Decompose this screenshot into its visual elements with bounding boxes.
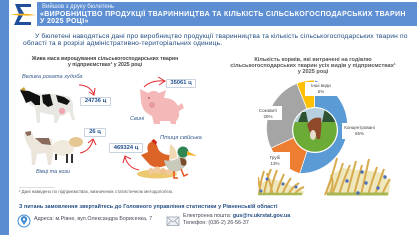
left chart heading bbox=[32, 56, 178, 68]
label: poultry: Птиця свійська bbox=[160, 134, 202, 140]
arrow: cattle bbox=[79, 84, 96, 96]
photo: cow on meadow bbox=[292, 107, 338, 153]
donut chart bbox=[266, 80, 348, 174]
left chart heading: у підприємствах¹ у 2025 році bbox=[68, 62, 142, 68]
intro text bbox=[23, 32, 408, 47]
address: Адреса: м.Рівне, вул.Олександра Борисенка, 7 bbox=[34, 216, 152, 222]
value: poultry bbox=[109, 143, 143, 153]
header note: Вийшов з друку бюлетень bbox=[42, 4, 114, 10]
label: coarse: Грубі bbox=[270, 155, 280, 160]
icon: envelope bbox=[166, 216, 180, 226]
label: other: 6% bbox=[318, 88, 324, 94]
segment: succulent 26% bbox=[266, 83, 314, 148]
left chart heading: Жива маса вирощування сільськогосподарських тварин bbox=[32, 56, 178, 62]
segment: concentrated 55% bbox=[300, 80, 348, 174]
icon: goat bbox=[24, 131, 53, 165]
segment: coarse 13% bbox=[271, 128, 314, 174]
icon: sigma logo bbox=[10, 4, 36, 25]
label: other bbox=[305, 82, 337, 96]
icon: hen, duck and eggs bbox=[137, 139, 197, 179]
value: sheep: 26 ц bbox=[89, 129, 101, 135]
label: concentrated: 55% bbox=[355, 131, 364, 136]
title: «ВИРОБНИЦТВО ПРОДУКЦІЇ ТВАРИННИЦТВА ТА КІЛЬКІСТЬ СІЛЬСЬКОГОСПОДАРСЬКИХ ТВАРИН bbox=[40, 10, 406, 18]
icon: location pin bbox=[18, 214, 30, 228]
right chart heading: сільськогосподарських тварин усіх видів у підприємствах¹ bbox=[230, 63, 396, 69]
intro text: області та в розрізі адміністративно-територіальних одиниць. bbox=[23, 40, 222, 47]
title bbox=[40, 10, 406, 25]
right chart heading bbox=[230, 57, 396, 75]
arrow: poultry bbox=[122, 155, 140, 170]
label: succulent: 26% bbox=[263, 114, 272, 118]
decoration: wheat left bbox=[258, 168, 305, 196]
decoration: wheat right bbox=[324, 158, 391, 196]
contact heading: З питань замовлення звертайтесь до Головного управління статистики у Рівненській області bbox=[19, 204, 278, 210]
contacts bbox=[183, 213, 290, 226]
value: cattle: 24736 ц bbox=[85, 98, 106, 104]
contacts: Електронна пошта: gus@rv.ukrstat.gov.ua bbox=[183, 213, 290, 219]
label: coarse: 13% bbox=[270, 161, 280, 166]
label: concentrated bbox=[342, 123, 377, 139]
footnote rule bbox=[19, 187, 54, 188]
icon: sheep bbox=[52, 137, 83, 163]
label: succulent bbox=[254, 106, 282, 120]
value: pig: 35061 ц bbox=[170, 80, 192, 86]
label: sheep and goats: Вівці та кози bbox=[36, 169, 70, 175]
label: concentrated: Концентровані bbox=[344, 125, 375, 130]
header band bbox=[37, 2, 417, 26]
icon: pig bbox=[140, 89, 184, 124]
contacts: Телефон: (036-2) 26-56-37 bbox=[183, 220, 249, 226]
value: pig bbox=[166, 79, 196, 88]
left blue strip bbox=[0, 0, 9, 235]
label: other: Інші види bbox=[311, 83, 331, 88]
arrow: sheep bbox=[80, 138, 96, 154]
label: coarse bbox=[260, 152, 290, 171]
icon: cow bbox=[20, 87, 75, 123]
value: cattle bbox=[80, 97, 111, 106]
label: pigs: Свині bbox=[130, 116, 144, 122]
label: cattle: Велика рогата худоба bbox=[22, 74, 83, 80]
right chart heading: Кількість кормів, які витрачені на годівлю bbox=[254, 57, 372, 63]
label: succulent: Соковиті bbox=[259, 108, 277, 112]
value: sheep bbox=[84, 128, 106, 137]
right chart heading: у 2025 році bbox=[298, 69, 328, 75]
title: У 2025 РОЦІ» bbox=[40, 18, 89, 25]
footnote: ¹ Дані наведено по підприємствах, визначених статистичною методологією. bbox=[19, 189, 173, 194]
value: poultry: 469324 ц bbox=[114, 145, 138, 151]
intro text: У бюлетені наводяться дані про виробництво продукції тваринництва та кількість сільськогосподарських тварин по bbox=[35, 32, 408, 40]
segment: other 6% bbox=[297, 80, 314, 128]
arrow: pig bbox=[144, 76, 166, 88]
